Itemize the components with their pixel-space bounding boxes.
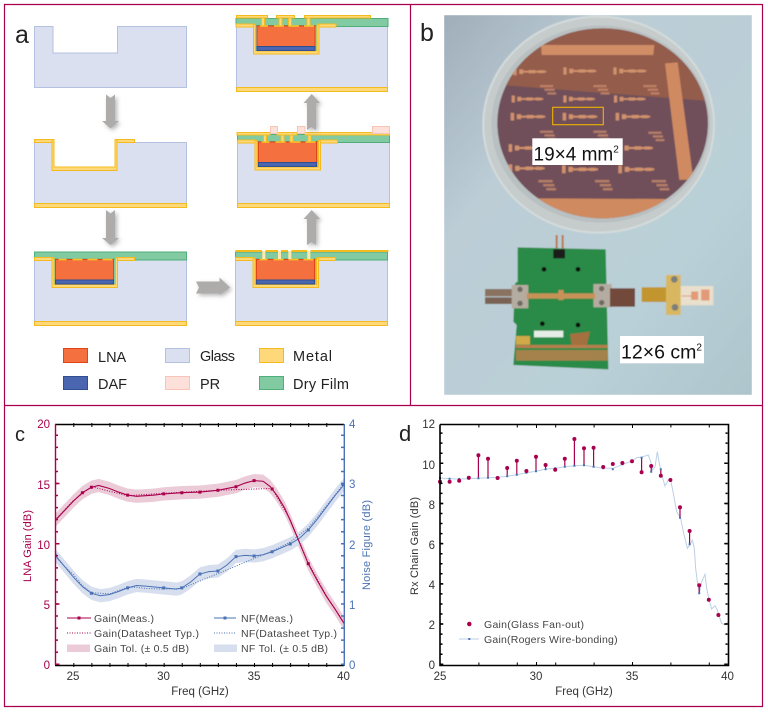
wafer carrier and wafer <box>483 17 717 233</box>
test boards <box>485 235 713 369</box>
Rogers wire-bonding curve <box>440 452 728 625</box>
right axis labels: 0 <box>349 660 355 672</box>
y axis labels: 6 <box>429 540 435 552</box>
x axis labels: 25 <box>67 671 79 683</box>
y axis labels: 8 <box>429 500 435 512</box>
legend: chart c <box>67 613 337 655</box>
x axis labels <box>67 671 350 683</box>
Rogers markers <box>440 458 718 616</box>
step 3: embedded chip with dry film <box>34 252 186 326</box>
left axis labels: 10 <box>37 540 50 552</box>
gain markers <box>82 481 308 564</box>
panel label d: d <box>399 421 411 446</box>
right axis labels: 2 <box>349 540 355 552</box>
arrow: step 5 to 6 <box>304 94 320 130</box>
y axis labels: 2 <box>429 620 435 632</box>
arrow: step 1 to 2 <box>102 94 119 128</box>
NF datasheet dotted line <box>55 483 344 594</box>
legend: chart c: NF(Meas.) <box>241 613 293 625</box>
glass fan-out markers <box>440 439 718 615</box>
legend: materials: PR <box>200 377 220 393</box>
x axis labels: 25 <box>434 671 446 683</box>
x axis labels: 35 <box>248 671 260 683</box>
y axis labels: 10 <box>422 460 435 472</box>
legend: chart d: Gain(Glass Fan-out) <box>484 619 584 631</box>
legend: chart c: Gain(Meas.) <box>94 613 154 625</box>
left axis labels: 15 <box>37 480 50 492</box>
legend: materials: LNA <box>98 350 127 366</box>
step 6: finished redistribution layer <box>236 16 388 92</box>
legend: materials: Glass <box>200 349 235 365</box>
y axis title: Rx Chain Gain (dB) <box>409 497 421 595</box>
step 4: vias through dry film <box>236 251 388 326</box>
left axis labels <box>37 419 50 672</box>
NF measured line <box>55 484 344 596</box>
x axis title: Freq (GHz) <box>555 686 613 698</box>
gain measured line <box>55 481 344 624</box>
plot curves <box>55 474 344 631</box>
legend: chart d <box>459 619 618 646</box>
y axis labels <box>422 419 436 672</box>
x axis labels: 30 <box>530 671 542 683</box>
y axis title: noise figure: Noise Figure (dB) <box>361 500 373 590</box>
y axis labels: 0 <box>429 660 435 672</box>
legend: chart c: Gain(Datasheet Typ.) <box>94 628 199 640</box>
highlight box on wafer <box>553 107 603 125</box>
panel b: photographs <box>420 15 752 395</box>
gain datasheet dotted line <box>55 487 344 623</box>
panel label a: a <box>15 21 29 49</box>
label: 19x4 mm2: 19×4 mm <box>534 144 613 166</box>
legend: materials <box>64 348 349 393</box>
right axis labels: 3 <box>349 479 355 491</box>
right axis labels: 1 <box>349 600 355 612</box>
step 1: glass with cavity <box>34 26 186 88</box>
photo: wafer and test boards <box>444 15 752 395</box>
panel label c: c <box>15 424 25 446</box>
x axis title: Freq (GHz) <box>171 686 229 698</box>
NF markers <box>55 484 343 593</box>
step 2: metal on cavity <box>34 140 186 208</box>
arrow: step 3 to 4 <box>196 278 230 295</box>
panel label b: b <box>420 19 434 47</box>
label: 12x6 cm2: 2 <box>696 342 702 354</box>
step 5: patterned photoresist <box>237 126 390 208</box>
x axis labels: 40 <box>337 671 350 683</box>
panel d: Rx chain gain <box>399 419 734 698</box>
right axis labels: 4 <box>349 419 356 431</box>
x axis labels: 40 <box>721 671 734 683</box>
legend: materials: DAF <box>98 377 127 393</box>
left axis labels: 5 <box>44 600 50 612</box>
x axis labels: 35 <box>626 671 638 683</box>
x axis labels <box>434 671 734 683</box>
legend: chart c: Gain Tol. (± 0.5 dB) <box>94 643 189 655</box>
panel c: LNA gain and noise figure <box>15 419 373 698</box>
difference stems <box>478 439 699 593</box>
legend: materials: Dry Film <box>293 377 349 393</box>
y axis labels: 4 <box>429 580 436 592</box>
arrow: step 2 to 3 <box>102 210 119 245</box>
label: 19x4 mm2 <box>532 138 623 166</box>
right axis labels <box>349 419 356 672</box>
legend: chart c: NF Tol. (± 0.5 dB) <box>241 643 328 655</box>
y axis title: LNA gain: LNA Gain (dB) <box>22 510 34 582</box>
legend: chart c: NF(Datasheet Typ.) <box>241 628 337 640</box>
left axis labels: 20 <box>37 419 50 431</box>
axes and ticks <box>55 424 344 666</box>
left axis labels: 0 <box>44 660 50 672</box>
NF tolerance band <box>55 478 344 602</box>
gain tolerance band <box>55 474 344 631</box>
label: 12x6 cm2: 12×6 cm <box>621 342 696 364</box>
arrow: step 4 to 5 <box>304 210 320 245</box>
legend: materials: Metal <box>293 349 332 365</box>
legend: chart d: Gain(Rogers Wire-bonding) <box>484 634 618 646</box>
label: 19x4 mm2: 2 <box>613 144 619 156</box>
y axis labels: 12 <box>422 419 435 431</box>
panel a: fabrication process <box>15 16 390 393</box>
axes and ticks <box>440 424 728 666</box>
x axis labels: 30 <box>157 671 170 683</box>
